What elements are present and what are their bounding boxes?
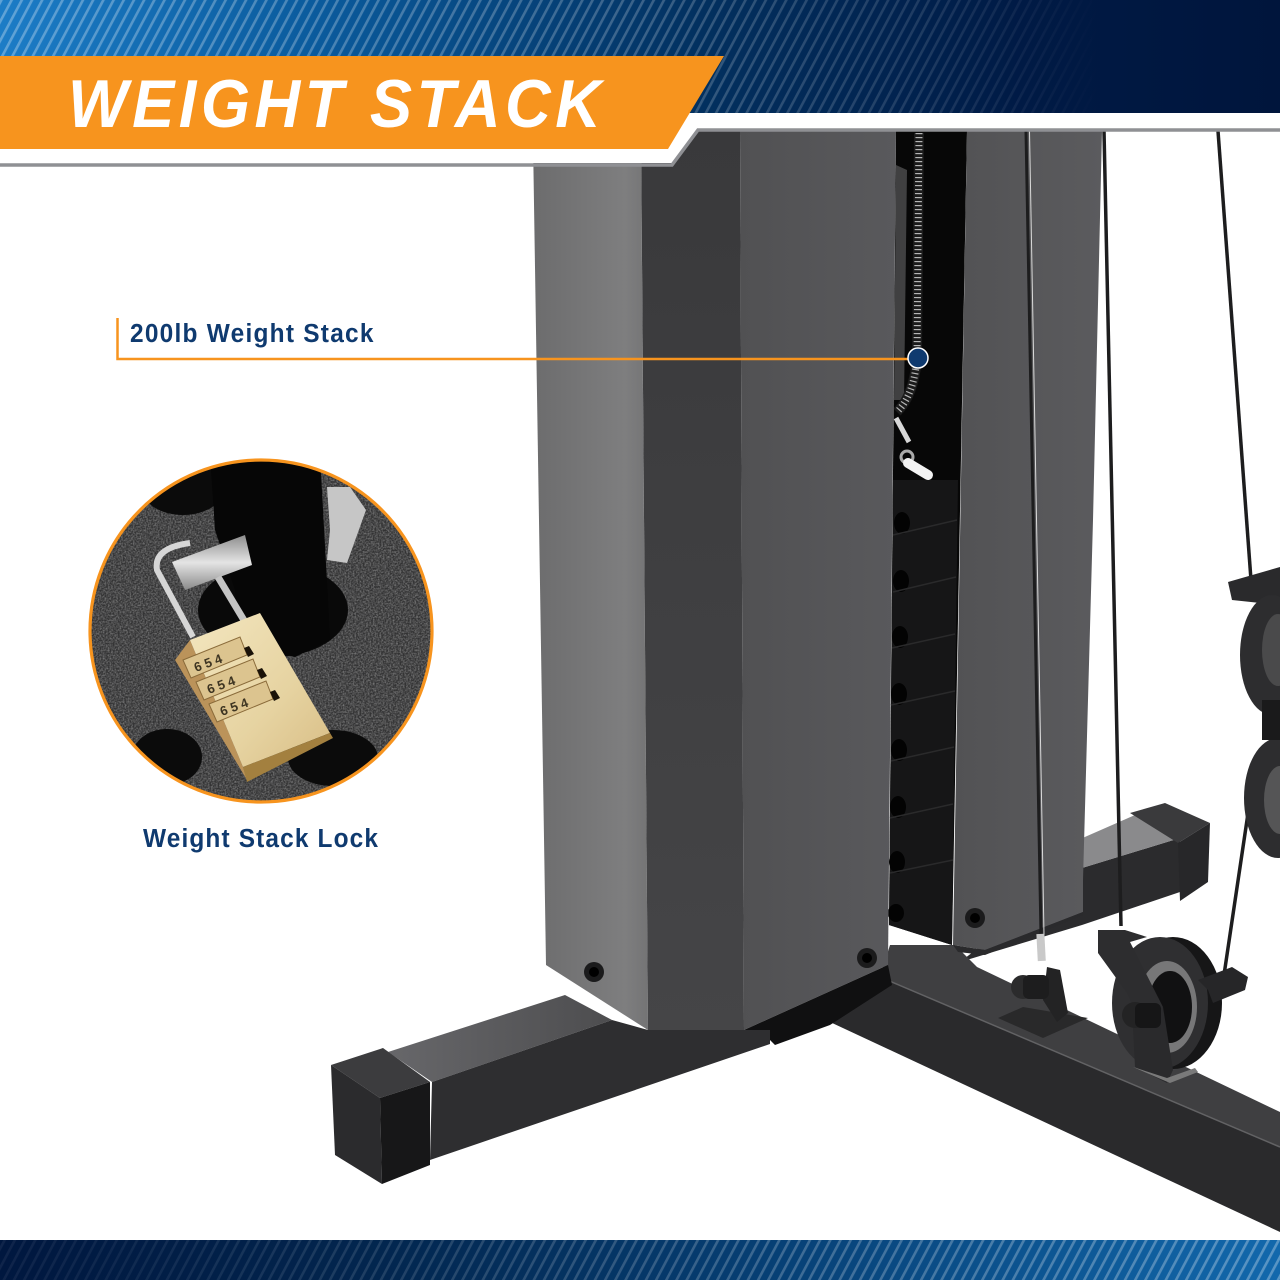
bolt: shroud right: [857, 948, 877, 968]
bolt: right panel: [965, 908, 985, 928]
callout dot: [908, 348, 928, 368]
callout: 200lb weight stack: [118, 318, 928, 368]
weight stack channel: [888, 131, 967, 945]
padlock: [175, 613, 333, 782]
lower pulley: [1098, 930, 1248, 1083]
padlock: 6 5 4: [205, 673, 238, 697]
callout label: 200lb Weight Stack: [130, 319, 374, 348]
white header trim: [0, 113, 1280, 165]
footer band: [0, 1240, 1280, 1280]
title: WEIGHT STACK: [68, 66, 605, 141]
right side panel: [953, 131, 1102, 955]
callout leader line: [118, 318, 908, 359]
inset: weight stack lock photo: [90, 455, 432, 802]
padlock: 6 5 4: [192, 651, 225, 675]
inset caption: Weight Stack Lock: [143, 824, 379, 853]
upper right pulleys: [1228, 567, 1280, 858]
back foot of frame: [960, 803, 1210, 962]
cable anchor: [998, 934, 1088, 1038]
selector pin coil cord: [896, 133, 928, 475]
header gradient band: [0, 0, 1280, 114]
main column shroud: [533, 131, 896, 1030]
bolt: shroud left: [584, 962, 604, 982]
left base foot: [331, 965, 892, 1184]
right base beam: [830, 945, 1280, 1232]
padlock: 6 5 4: [218, 695, 251, 719]
title ribbon: [0, 56, 724, 149]
cables: [1026, 131, 1251, 975]
